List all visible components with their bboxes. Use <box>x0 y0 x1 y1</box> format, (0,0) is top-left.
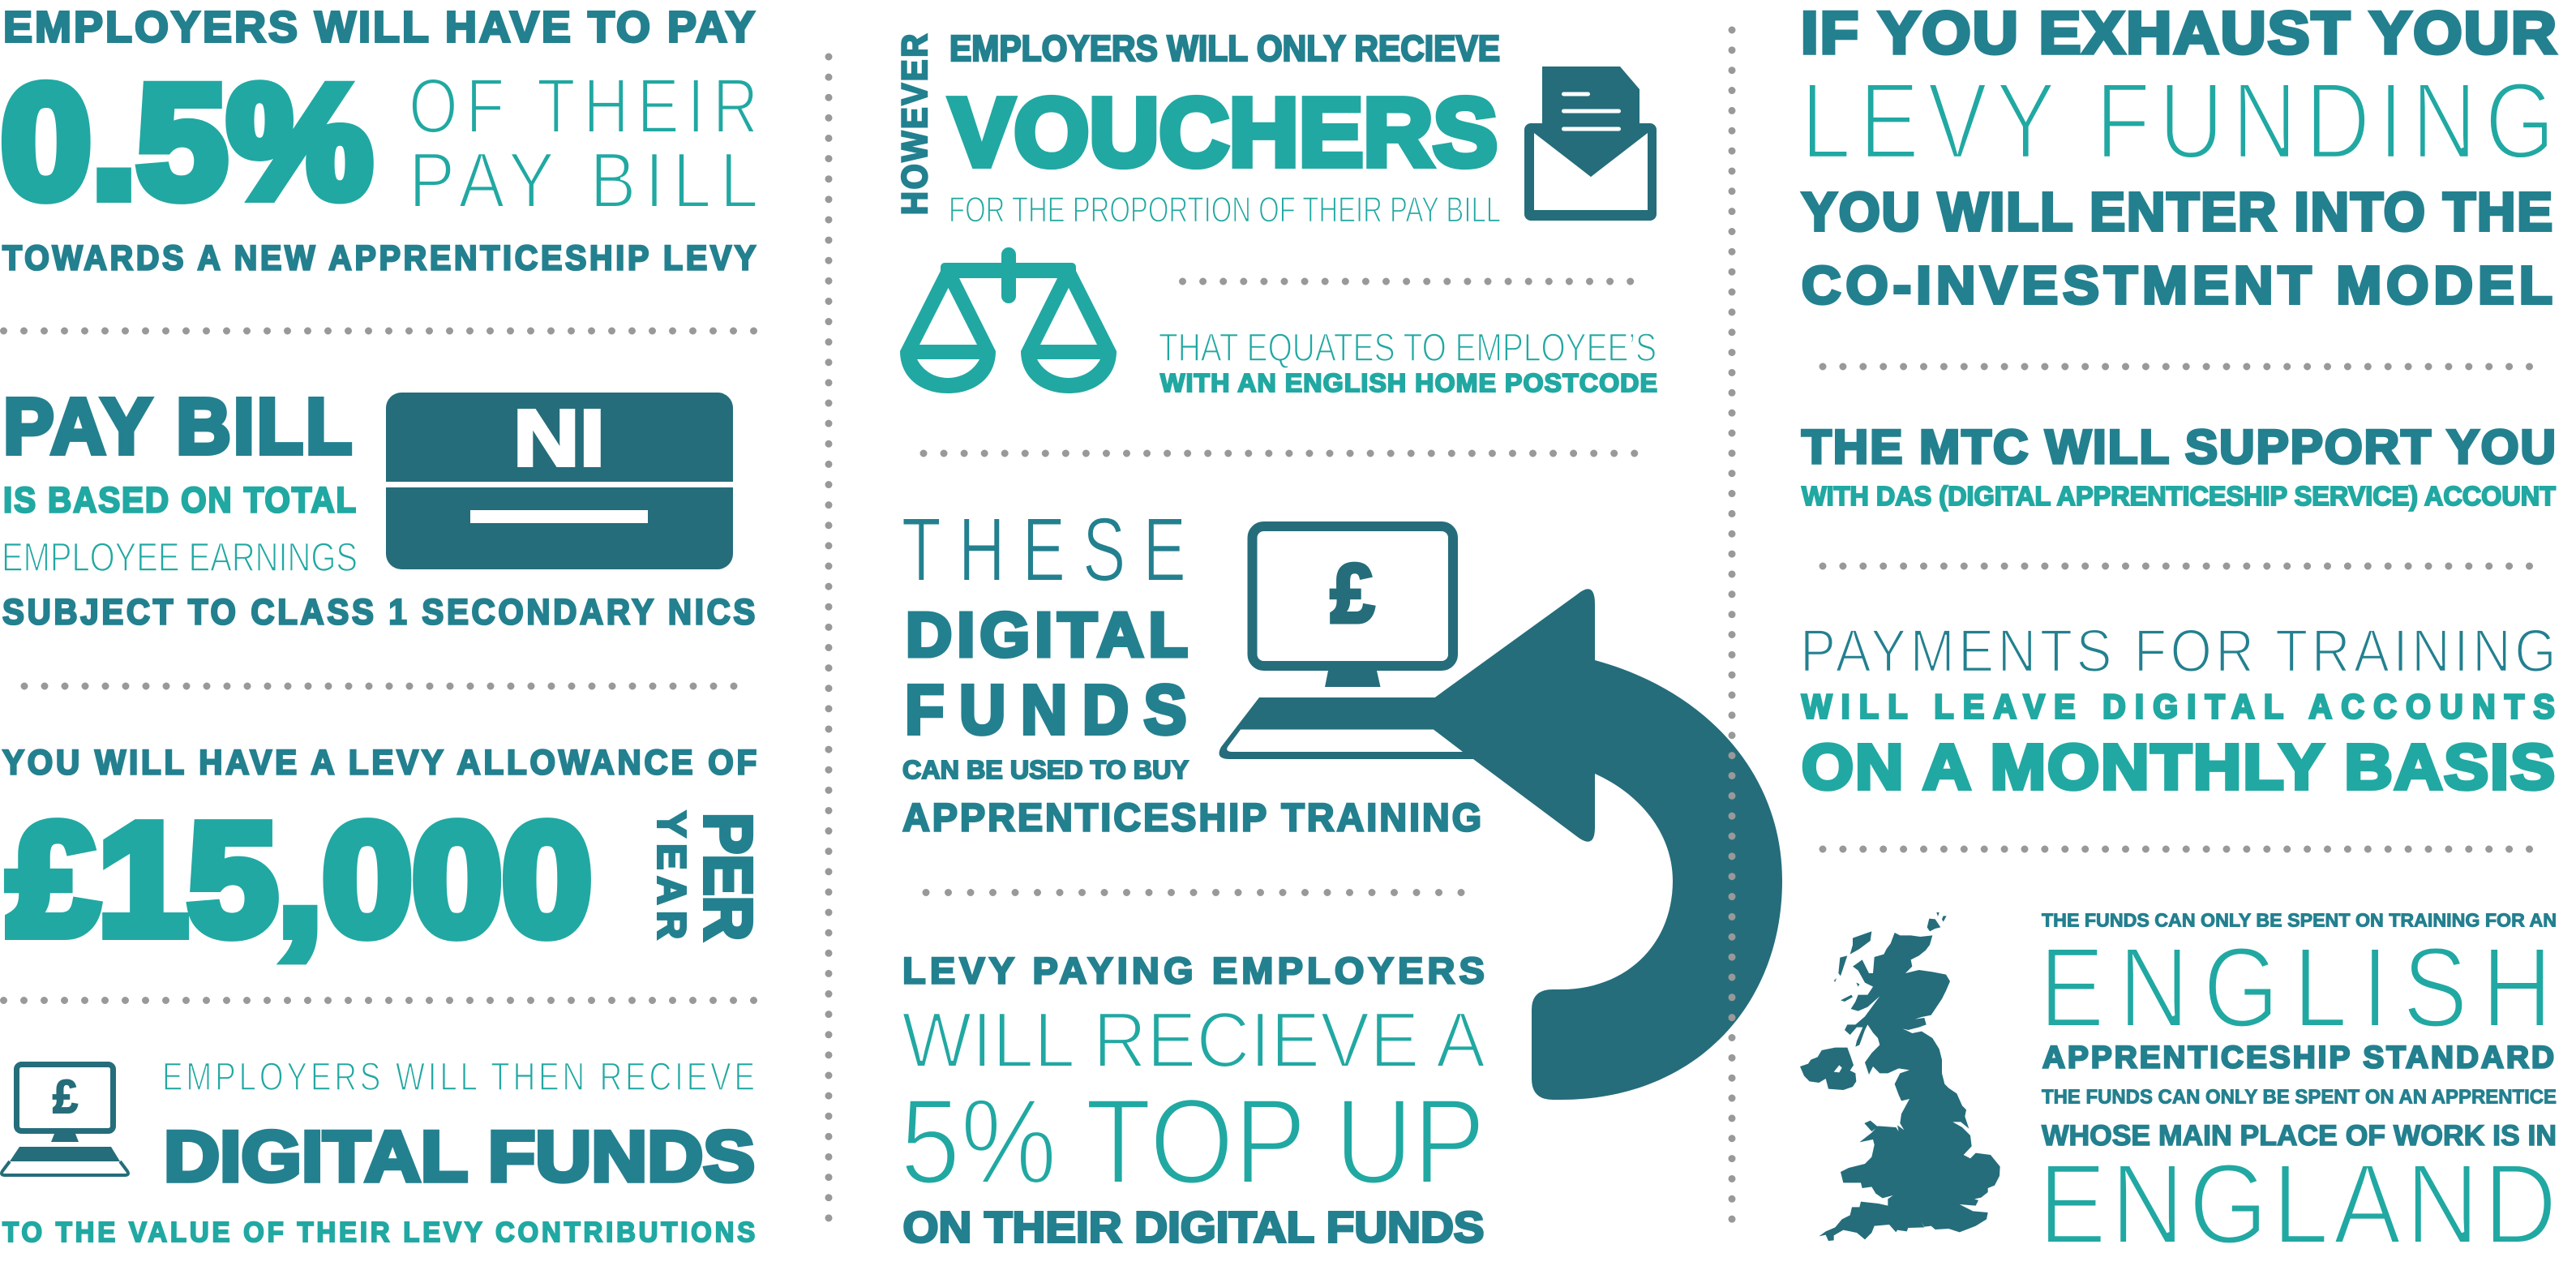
text: employee earnings: EMPLOYEE EARNINGS <box>2 534 358 580</box>
text: you will enter into the: YOU WILL ENTER INTO THE <box>1802 182 2554 242</box>
panel: levy top up <box>900 951 1489 1252</box>
heading: you will have a levy allowance of: YOU WILL HAVE A LEVY ALLOWANCE OF <box>2 744 760 783</box>
text: subject to class 1 secondary nics: SUBJECT TO CLASS 1 SECONDARY NICS <box>2 593 758 633</box>
text: to the value of their levy contributions: TO THE VALUE OF THEIR LEVY CONTRIBUTIONS <box>2 1217 758 1248</box>
heading: levy paying employers: LEVY PAYING EMPLOYERS <box>902 951 1489 992</box>
heading: pay bill: PAY BILL <box>3 382 354 470</box>
panel: co-investment <box>1801 0 2563 315</box>
panel: monthly payments <box>1800 616 2564 803</box>
text: on their digital funds: ON THEIR DIGITAL FUNDS <box>903 1204 1484 1252</box>
heading: the mtc will support you: THE MTC WILL SUPPORT YOU <box>1802 421 2557 474</box>
icon: computer with pound sign <box>1219 526 1484 759</box>
text: whose main place of work is in: WHOSE MAIN PLACE OF WORK IS IN <box>2042 1119 2557 1152</box>
text: employers will then recieve: EMPLOYERS WILL THEN RECIEVE <box>162 1055 758 1099</box>
icon: national insurance card: NI <box>513 393 605 483</box>
text: pay bill: PAY BILL <box>409 136 767 224</box>
panel: english standard <box>2038 910 2566 1266</box>
text: funds can only be spent on training for an: THE FUNDS CAN ONLY BE SPENT ON TRAINING FOR AN <box>2042 910 2557 931</box>
text: with an english home postcode: WITH AN ENGLISH HOME POSTCODE <box>1160 368 1658 397</box>
big number: £15,000: £15,000 <box>8 791 592 968</box>
text: employers will only recieve: EMPLOYERS WILL ONLY RECIEVE <box>949 28 1500 69</box>
heading: vouchers: VOUCHERS <box>949 79 1498 187</box>
text: co-investment model: CO-INVESTMENT MODEL <box>1802 255 2557 315</box>
text: apprenticeship training: APPRENTICESHIP TRAINING <box>902 796 1484 840</box>
big text: 5% top up: 5% TOP UP <box>900 1073 1485 1209</box>
rotated text: however: HOWEVER <box>895 32 935 215</box>
text: for the proportion of their pay bill: FOR THE PROPORTION OF THEIR PAY BILL <box>949 191 1501 230</box>
heading: if you exhaust your: IF YOU EXHAUST YOUR <box>1801 0 2558 67</box>
arrow: curved return arrow <box>1412 589 1782 1100</box>
icon: envelope with document <box>1524 67 1657 221</box>
big number: 0.5%: 0.5% <box>1 52 372 231</box>
panel: pay bill definition <box>2 382 758 633</box>
heading: digital: DIGITAL <box>906 600 1193 670</box>
text: with das account: WITH DAS (DIGITAL APPRENTICESHIP SERVICE) ACCOUNT <box>1802 482 2557 512</box>
heading: funds: FUNDS <box>905 672 1202 749</box>
panel: mtc support <box>1802 421 2557 512</box>
icon: balance scales <box>900 247 1117 393</box>
heading: on a monthly basis: ON A MONTHLY BASIS <box>1802 732 2557 803</box>
text: will recieve a: WILL RECIEVE A <box>902 996 1485 1084</box>
panel: english home postcode <box>900 247 1658 397</box>
heading: digital funds: DIGITAL FUNDS <box>164 1116 755 1196</box>
text: that equates to employee's: THAT EQUATES TO EMPLOYEE’S <box>1159 326 1657 370</box>
heading: employers will have to pay: EMPLOYERS WILL HAVE TO PAY <box>3 3 757 52</box>
text: is based on total: IS BASED ON TOTAL <box>3 481 358 521</box>
panel: digital funds usage <box>902 499 1484 840</box>
icon: computer with pound sign <box>2 1064 128 1175</box>
text: apprenticeship standard: APPRENTICESHIP STANDARD <box>2042 1041 2557 1075</box>
icon: computer with pound sign: £ <box>1331 547 1374 640</box>
rotated text: year: YEAR <box>649 811 694 946</box>
text: towards a new apprenticeship levy: TOWARDS A NEW APPRENTICESHIP LEVY <box>2 239 759 278</box>
text: of their: OF THEIR <box>409 63 766 149</box>
heading: these: THESE <box>902 499 1203 600</box>
panel: digital funds <box>2 1055 758 1248</box>
icon: computer with pound sign: £ <box>53 1071 78 1123</box>
icon: national insurance card <box>386 393 733 569</box>
rotated text: per: PER <box>691 813 765 941</box>
text: funds can only be spent on an apprentice: THE FUNDS CAN ONLY BE SPENT ON AN APPRENTICE <box>2042 1087 2557 1108</box>
panel: vouchers <box>895 28 1657 230</box>
icon: map of the UK <box>1800 912 2000 1241</box>
panel: levy allowance <box>2 744 765 968</box>
text: can be used to buy: CAN BE USED TO BUY <box>902 755 1189 784</box>
panel: levy percentage <box>1 3 767 278</box>
